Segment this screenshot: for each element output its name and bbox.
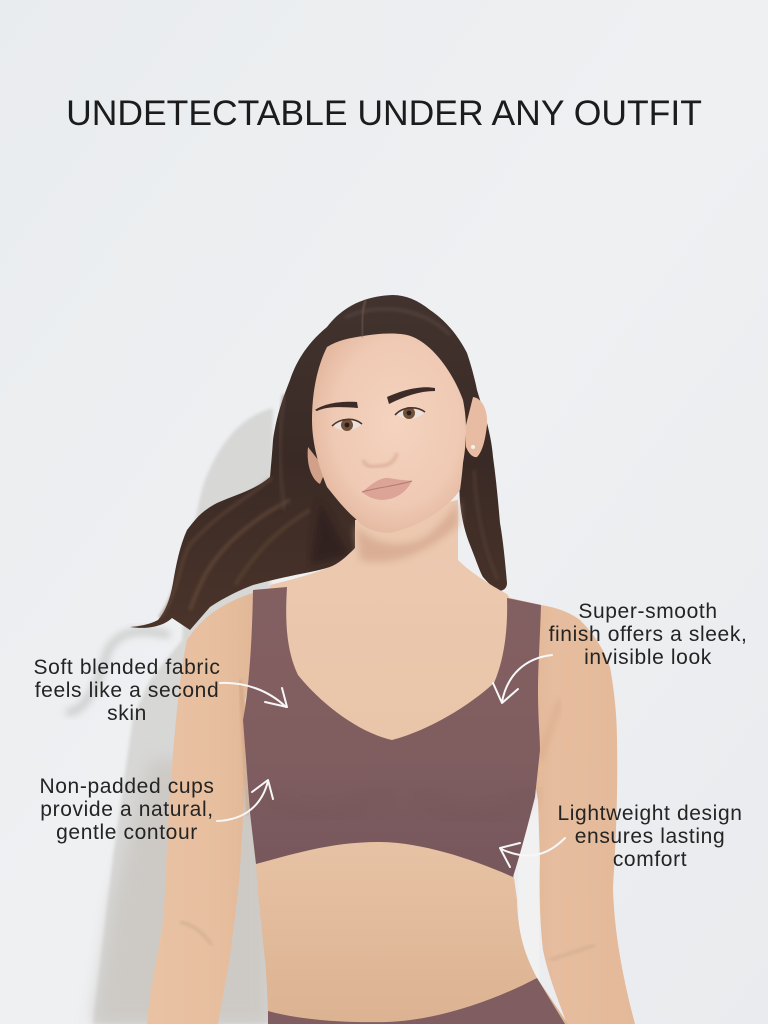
arm creases <box>180 680 595 960</box>
callout: super-smooth finish: finish offers a sleek, <box>549 623 747 646</box>
callout: soft blended fabric: feels like a second <box>35 679 219 702</box>
callout: lightweight design: comfort <box>613 848 687 871</box>
callout: non-padded cups <box>39 775 215 844</box>
callout: soft blended fabric: skin <box>107 702 147 725</box>
torso <box>252 500 568 1024</box>
ear <box>466 397 487 457</box>
flowing hair <box>130 295 507 630</box>
left arm <box>147 593 265 1024</box>
nose <box>363 453 397 467</box>
callout: lightweight design: Lightweight design <box>557 802 743 825</box>
callout: non-padded cups: provide a natural, <box>40 798 214 821</box>
right arm <box>510 598 635 1024</box>
callout: super-smooth finish: invisible look <box>584 646 712 669</box>
neck shadow <box>356 500 458 562</box>
wall shadow <box>66 408 540 1024</box>
callout: lightweight design <box>557 802 743 871</box>
eyebrows <box>315 402 358 411</box>
callout: super-smooth finish: Super-smooth <box>578 600 718 623</box>
callout: super-smooth finish <box>548 600 747 669</box>
arrow: soft fabric <box>220 683 287 707</box>
callout: lightweight design: ensures lasting <box>575 825 725 848</box>
callout: non-padded cups: gentle contour <box>56 821 198 844</box>
bra <box>243 587 541 877</box>
title: UNDETECTABLE UNDER ANY OUTFIT <box>66 93 702 133</box>
waistband <box>268 978 565 1024</box>
hair parting <box>362 300 366 337</box>
callout: non-padded cups: Non-padded cups <box>39 775 215 798</box>
eyes <box>332 407 425 431</box>
lips <box>362 478 412 500</box>
arrow: lightweight <box>500 838 565 867</box>
face <box>312 333 466 533</box>
model figure <box>130 295 635 1024</box>
arrow: non-padded <box>217 780 273 821</box>
callout: soft blended fabric: Soft blended fabric <box>34 656 220 679</box>
arrow: super-smooth <box>493 655 552 703</box>
callout: soft blended fabric <box>34 656 220 725</box>
